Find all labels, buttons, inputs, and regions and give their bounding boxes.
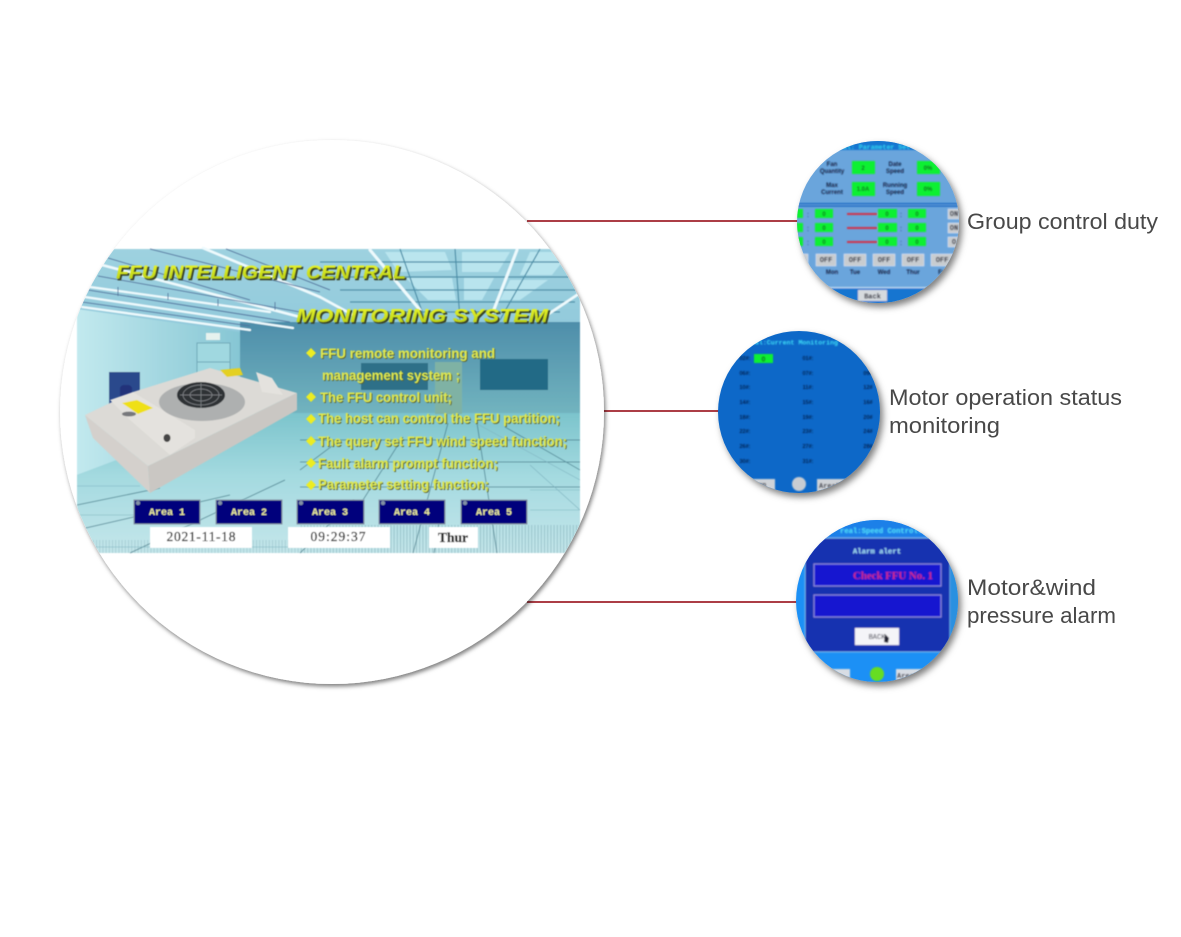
text block: feature list: The query set FFU wind speed function; [318, 434, 567, 449]
panel: group control duty screen: OFF [820, 257, 832, 265]
text block: feature list: The host can control the FFU partition; [318, 411, 560, 426]
panel: group control duty screen: Max [826, 183, 838, 189]
panel: group control duty screen: 0 [915, 212, 919, 218]
area buttons: Area 3 [312, 508, 348, 519]
panel: current monitoring screen: 28# [863, 444, 873, 450]
panel: group control duty screen: : [900, 212, 902, 219]
panel: group control duty screen: 0 [915, 226, 919, 232]
label: motor operation status monitoring: monitoring [889, 413, 1000, 438]
ceiling strips [82, 248, 577, 330]
panel: group control duty screen: : [807, 212, 809, 219]
panel: group control duty screen: : [900, 226, 902, 233]
icon: FFU unit [85, 368, 297, 493]
panel: current monitoring screen: 20# [863, 415, 873, 421]
label: motor and wind pressure alarm: Motor&wind [967, 575, 1096, 600]
panel: current monitoring screen: Area5 [819, 483, 840, 491]
panel: group control duty screen: Mon [826, 270, 838, 276]
panel: current monitoring screen: 24# [863, 429, 873, 435]
panel: group control duty screen: Running [883, 183, 907, 189]
area buttons: Area 2 [231, 508, 267, 519]
text block: feature list: Parameter setting function; [319, 478, 490, 493]
panel: current monitoring screen: 07#: [802, 371, 814, 377]
panel: current monitoring screen: 06#: [739, 371, 751, 377]
panel: group control duty screen: : [900, 240, 902, 247]
panel: current monitoring screen: 0 [762, 356, 766, 364]
text block: feature list [306, 346, 568, 493]
label: motor and wind pressure alarm: pressure alarm [967, 603, 1116, 628]
label: group control duty: Group control duty [967, 209, 1159, 234]
text block: feature list: The FFU control unit; [320, 390, 452, 405]
panel: group control duty screen: real: Parameter Set [835, 144, 910, 151]
panel: current monitoring screen: 01#: [802, 356, 814, 362]
screen background: cleanroom scene [77, 248, 580, 553]
panel: group control duty screen: : [807, 240, 809, 247]
panel: group control duty screen: : [807, 226, 809, 233]
panel: current monitoring screen: 09# [863, 371, 873, 377]
panel: current monitoring screen: 14#: [739, 400, 751, 406]
connector line: motor operation status [600, 410, 720, 412]
panel: current monitoring screen: real:Current Monitoring [747, 340, 838, 346]
connector line: alarm [527, 601, 800, 603]
label: motor operation status monitoring [889, 385, 1122, 438]
panel: group control duty screen: Fan [827, 162, 838, 168]
panel: group control duty screen: Fri [938, 270, 946, 276]
text block: feature list: FFU remote monitoring and [320, 346, 495, 361]
panel: group control duty screen: Tue [850, 270, 861, 276]
panel: current monitoring screen: 22#: [739, 429, 751, 435]
floor tiles [300, 525, 580, 553]
panel: current monitoring screen: 30#: [739, 459, 751, 465]
panel: current monitoring screen: 12# [863, 385, 873, 391]
panel: alarm alert screen: Check FFU No. 1 [853, 570, 933, 582]
panel: group control duty screen: 2 [861, 166, 865, 172]
panel: group control duty screen: OFF [849, 257, 861, 265]
panel: group control duty screen: 0 [885, 226, 889, 232]
area buttons [134, 500, 527, 524]
label: motor and wind pressure alarm [967, 575, 1116, 628]
panel: current monitoring screen [718, 331, 880, 493]
panel: group control duty screen: O [952, 239, 956, 247]
panel: alarm alert screen: Area5 [897, 673, 918, 681]
panel: group control duty screen: 0 [822, 226, 826, 232]
panel: alarm alert screen: real:Speed Control: [840, 528, 922, 536]
panel: group control duty screen: Current [821, 190, 843, 196]
panel: group control duty screen: OFF [936, 257, 948, 265]
panel: current monitoring screen: 02#: [739, 356, 751, 362]
panel: current monitoring screen: 26#: [739, 444, 751, 450]
text block: feature list: management system ; [323, 369, 461, 384]
date, time and day readouts: 09:29:37 [310, 529, 366, 544]
panel: group control duty screen: 0 [822, 212, 826, 218]
panel: group control duty screen: Wed [878, 270, 891, 276]
panel: group control duty screen: Back [864, 294, 881, 302]
panel: group control duty screen: ON [950, 225, 958, 233]
panel: alarm alert screen [790, 515, 970, 683]
panel: current monitoring screen: 11#: [803, 385, 814, 391]
text block: feature list: FFU remote monitoring and [321, 347, 496, 362]
heading: FFU intelligent central monitoring system [116, 262, 550, 328]
panel: current monitoring screen: 31#: [802, 459, 814, 465]
panel: current monitoring screen: ump [754, 482, 766, 490]
panel: main monitoring screen circle [60, 140, 604, 684]
date, time and day readouts: 2021-11-18 [166, 529, 236, 544]
panel: group control duty screen: ON [950, 211, 958, 219]
panel: group control duty screen: 0 [915, 240, 919, 246]
area buttons: Area 4 [394, 508, 430, 519]
panel: group control duty screen: 0 [885, 212, 889, 218]
panel: current monitoring screen: 19#: [802, 415, 814, 421]
date, time and day readouts: Thur [438, 530, 468, 545]
label: motor operation status monitoring: Motor operation status [889, 385, 1122, 410]
panel: group control duty screen [790, 135, 970, 308]
area buttons: Area 1 [149, 508, 185, 519]
text block: feature list: management system ; [322, 368, 460, 383]
panel: group control duty screen: OFF [907, 257, 919, 265]
text block: feature list: Parameter setting function; [318, 477, 489, 492]
panel: current monitoring screen: 10#: [739, 385, 751, 391]
panel: group control duty screen: 0 [885, 240, 889, 246]
date, time and day readouts [150, 527, 478, 548]
area buttons: Area 5 [476, 508, 512, 519]
panel: group control duty screen: OFF [878, 257, 890, 265]
panel: group control duty screen: Speed [886, 169, 904, 175]
text block: feature list: The FFU control unit; [321, 391, 453, 406]
back wall windows and door [361, 363, 428, 390]
heading: FFU intelligent central monitoring system: MONITORING SYSTEM [298, 306, 550, 328]
panel: current monitoring screen: 23#: [802, 429, 814, 435]
heading: FFU intelligent central monitoring system: FFU INTELLIGENT CENTRAL [118, 263, 408, 284]
text block: feature list: Fault alarm prompt function; [318, 456, 498, 471]
text block: feature list: The query set FFU wind speed function; [319, 435, 568, 450]
panel: current monitoring screen: 16# [863, 400, 873, 406]
ceiling right: panel grid [385, 252, 570, 300]
connector line: group control duty [527, 220, 800, 222]
panel: current monitoring screen: 18#: [739, 415, 751, 421]
panel: group control duty screen: Date [888, 162, 902, 168]
panel: alarm alert screen: Alarm alert [853, 548, 901, 556]
panel: alarm alert screen: BACK [869, 634, 886, 642]
panel: group control duty screen: 0 [822, 240, 826, 246]
panel: group control duty screen: 0% [924, 187, 933, 193]
panel: group control duty screen: Quantity [820, 169, 845, 175]
heading: FFU intelligent central monitoring system: MONITORING SYSTEM [296, 305, 549, 326]
heading: FFU intelligent central monitoring system: FFU INTELLIGENT CENTRAL [116, 262, 406, 282]
text block: feature list: Fault alarm prompt function; [319, 457, 499, 472]
panel: current monitoring screen: 15#: [802, 400, 814, 406]
text block: feature list: The host can control the FFU partition; [319, 412, 561, 427]
panel: group control duty screen: Speed [886, 190, 904, 196]
panel: current monitoring screen: 27#: [802, 444, 814, 450]
panel: group control duty screen: 0% [924, 166, 933, 172]
panel: group control duty screen: 1.0A [857, 187, 870, 193]
panel: group control duty screen: Thur [906, 270, 920, 276]
